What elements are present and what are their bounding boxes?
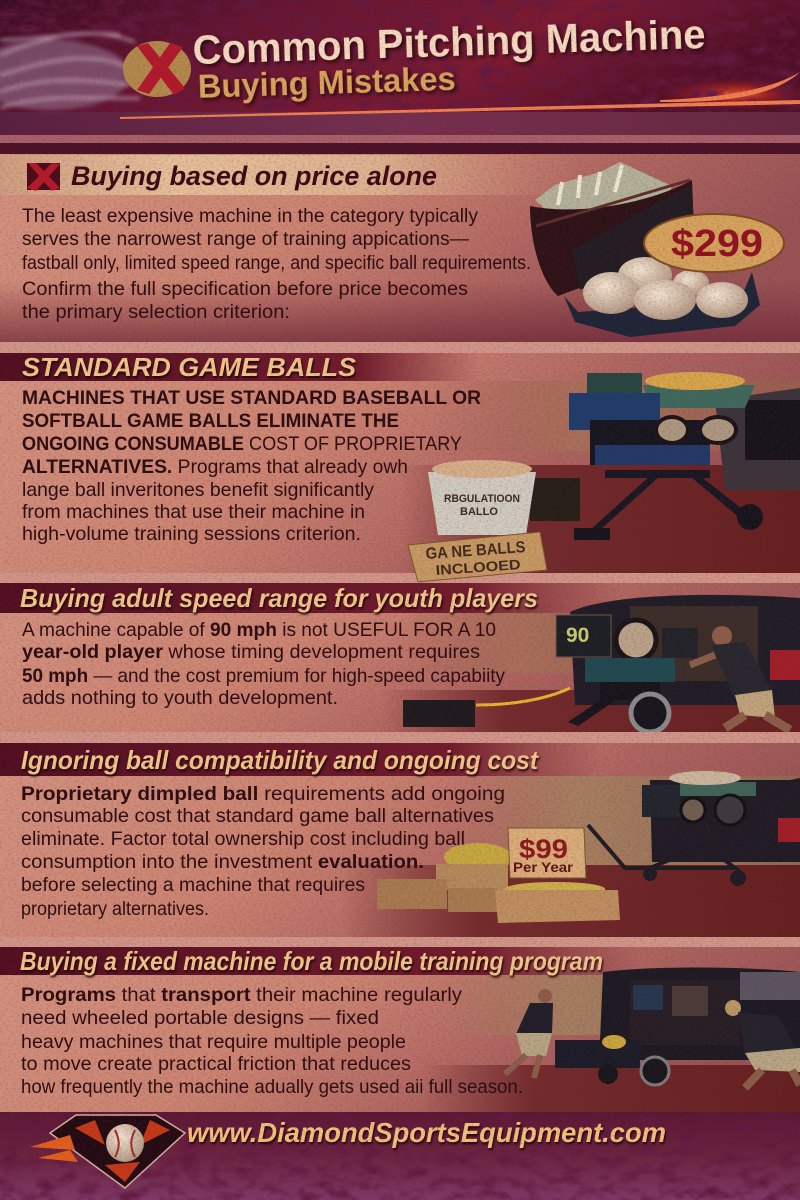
body text: heavy machines that require multiple people <box>21 1031 406 1053</box>
heading band <box>0 353 480 381</box>
body text: proprietary alternatives. <box>21 898 209 920</box>
body text <box>22 205 531 323</box>
wheeled cart <box>555 1035 669 1085</box>
body text: before selecting a machine that requires <box>21 874 365 896</box>
title <box>192 11 707 105</box>
icon: tray of baseballs <box>564 257 760 337</box>
body text: serves the narrowest range of training appications— <box>22 228 469 250</box>
separator <box>0 342 800 353</box>
header background <box>0 0 800 154</box>
body text: year-old player whose timing development requires <box>22 641 480 663</box>
separator <box>0 573 800 583</box>
heading band <box>0 743 600 776</box>
body text: to move create practical friction that reduces <box>21 1053 411 1075</box>
field and ground scene <box>400 381 800 573</box>
body text: lange ball inveritones benefit significantly <box>22 479 374 501</box>
pitching machine <box>569 372 763 540</box>
panel: buying based on price alone <box>0 154 800 342</box>
separator <box>0 937 800 947</box>
pitching machine with 90 display <box>556 615 698 732</box>
body text: ONGOING CONSUMABLE COST OF PROPRIETARY <box>22 433 462 455</box>
panel: adult speed range <box>0 583 800 732</box>
heading: Ignoring ball compatibility and ongoing cost <box>21 745 539 775</box>
heading: Buying adult speed range for youth players <box>20 583 538 613</box>
body text <box>22 619 505 709</box>
panel: ball compatibility <box>0 743 800 937</box>
pitching machine with 90 display: 90 <box>566 624 589 647</box>
body text <box>21 984 523 1098</box>
body text: ALTERNATIVES. Programs that already owh <box>22 456 408 478</box>
bucket of balls <box>428 460 536 535</box>
panel background <box>0 743 800 937</box>
body text: consumable cost that standard game ball alternatives <box>21 805 494 827</box>
body text: from machines that use their machine in <box>22 501 365 523</box>
icon: red X square <box>27 163 60 191</box>
field and ground scene <box>340 776 800 937</box>
body text: MACHINES THAT USE STANDARD BASEBALL OR <box>22 387 481 409</box>
title: Common Pitching Machine <box>192 11 706 73</box>
separator <box>0 732 800 743</box>
panel background <box>0 583 800 732</box>
person at tailgate <box>725 1000 800 1088</box>
bucket of balls: RBGULATIOON <box>444 493 520 505</box>
body text: fastball only, limited speed range, and specific ball requirements. <box>22 252 531 274</box>
icon: wallet with cash <box>530 162 694 296</box>
panel: standard game balls <box>0 352 800 582</box>
ground shading <box>0 280 800 342</box>
footer background <box>0 1112 800 1200</box>
body text: consumption into the investment evaluation. <box>21 851 424 873</box>
body text: SOFTBALL GAME BALLS ELIMINATE THE <box>22 410 399 432</box>
body text <box>22 387 481 545</box>
vehicle <box>715 388 800 490</box>
title: Buying Mistakes <box>197 60 456 105</box>
panel background <box>0 947 800 1112</box>
price tag <box>644 214 784 272</box>
field and ground scene <box>420 975 800 1112</box>
body text: 50 mph — and the cost premium for high-speed capabiity <box>22 665 505 687</box>
body text: need wheeled portable designs — fixed <box>21 1007 379 1029</box>
body text: high-volume training sessions criterion. <box>22 523 361 545</box>
cardboard boxes with balls <box>377 843 620 923</box>
bucket of balls: BALLO <box>460 506 498 518</box>
body text: the primary selection criterion: <box>22 301 290 323</box>
heading: Buying based on price alone <box>71 161 437 191</box>
icon: baseball with red X <box>123 41 191 97</box>
heading band <box>0 947 640 975</box>
vehicle <box>570 595 800 705</box>
sign: game balls included: GA NE BALLS <box>425 539 526 563</box>
price tag: $299 <box>671 223 763 265</box>
wheeled cart <box>588 825 744 884</box>
vehicle with machine <box>600 968 800 1060</box>
panel: fixed machine for mobile program <box>0 946 800 1112</box>
body text: adds nothing to youth development. <box>22 687 338 709</box>
icon: smoke trail <box>0 33 140 110</box>
decorative orange swoosh <box>120 72 800 119</box>
body text: Proprietary dimpled ball requirements add ongoing <box>21 783 505 805</box>
sign: $99 per year: $99 <box>519 834 568 864</box>
heading: STANDARD GAME BALLS <box>22 352 357 382</box>
person pushing cart <box>505 989 553 1078</box>
website url: www.DiamondSportsEquipment.com <box>187 1117 666 1148</box>
body text <box>21 783 505 920</box>
body text: The least expensive machine in the category typically <box>22 205 478 227</box>
sign: game balls included: INCLOOED <box>435 556 521 578</box>
generator <box>530 478 580 521</box>
person at machine <box>690 626 790 730</box>
sign: $99 per year: Per Year <box>513 859 574 875</box>
body text: A machine capable of 90 mph is not USEFUL FOR A 10 <box>22 619 496 641</box>
panel background <box>0 353 800 573</box>
panel background <box>0 154 800 342</box>
generator and cable <box>403 688 570 727</box>
heading band <box>0 583 620 613</box>
body text: Programs that transport their machine regularly <box>21 984 462 1006</box>
body text: Confirm the full specification before price becomes <box>22 278 468 300</box>
body text: how frequently the machine adually gets used aii full season. <box>21 1076 523 1098</box>
body text: eliminate. Factor total ownership cost including ball <box>21 828 465 850</box>
sign: game balls included <box>408 532 547 582</box>
heading: Buying a fixed machine for a mobile training program <box>20 946 603 976</box>
logo: diamond with baseball <box>30 1115 185 1188</box>
sign: $99 per year <box>508 828 586 878</box>
field and ground scene <box>380 613 800 732</box>
vehicle with machine <box>642 771 800 862</box>
heading strip <box>0 155 580 195</box>
